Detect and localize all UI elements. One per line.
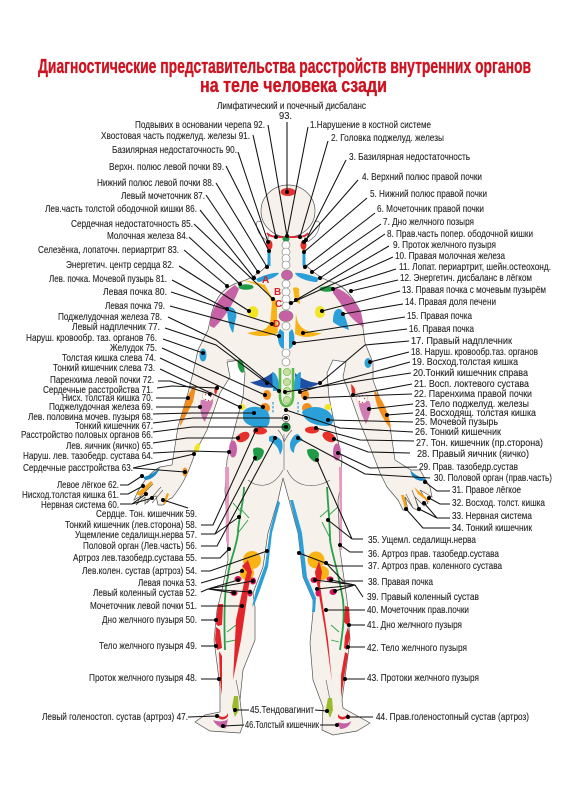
label 54: Лев.колен. сустав (артроз) 54.	[82, 565, 197, 577]
label 91: Хвостовая часть поджелуд. железы 91.	[101, 130, 250, 142]
label 24: 24. Восходящ. толстая кишка	[415, 407, 536, 419]
label 3: 3. Базилярная недостаточность	[349, 151, 470, 163]
label 33	[417, 501, 532, 522]
label 34	[404, 507, 532, 534]
label 9	[294, 239, 496, 302]
label 67: Тонкий кишечник 67.	[75, 420, 153, 432]
body silhouette	[134, 185, 432, 735]
label 92: Подвывих в основании черепа 92.	[135, 119, 265, 131]
label 41: 41. Дно желчного пузыря	[367, 619, 462, 631]
label 12	[349, 272, 532, 293]
label 31	[423, 480, 521, 496]
label 79	[105, 300, 281, 338]
label 26	[284, 408, 501, 438]
label 93: 93.	[279, 110, 292, 122]
label 84: Молочная железа 84.	[107, 230, 188, 242]
label 80: Левая почка 80.	[103, 286, 167, 298]
label 36	[338, 543, 499, 560]
label 91	[101, 130, 278, 239]
spine circles	[279, 241, 293, 366]
label 77	[72, 321, 269, 385]
label 50: Дно желчного пузыря 50.	[102, 614, 197, 626]
label 53	[138, 569, 244, 589]
back orange zones	[243, 280, 322, 337]
label 22: 22. Паренхима правой почки	[414, 388, 532, 400]
label 2: 2. Головка поджелуд. железы	[331, 132, 444, 144]
label 46: 46.Толстый кишечник	[245, 719, 319, 731]
label 60	[41, 492, 154, 511]
label 52: Левый коленный сустав 52.	[93, 587, 197, 599]
label 23: 23. Тело поджелуд. железы	[415, 398, 529, 410]
label 41	[347, 619, 462, 631]
label 76: Наруш. кровообр. таз. органов 76.	[26, 332, 157, 344]
torso and arms	[134, 236, 432, 735]
label 87	[121, 190, 260, 274]
label 14	[341, 296, 496, 316]
gluteal creases	[227, 360, 330, 486]
neck zones	[256, 236, 319, 282]
label 18	[368, 346, 538, 364]
label 83: Селезёнка, лопаточн. периартрит 83.	[38, 244, 179, 256]
zone letters: A	[262, 275, 269, 286]
label 6: 6. Мочеточник правой почки	[377, 203, 484, 215]
neck arc	[267, 233, 308, 237]
label 32	[427, 496, 545, 509]
label 1	[285, 119, 431, 238]
label 93	[217, 100, 366, 194]
label 82	[66, 259, 251, 313]
label 6	[303, 203, 484, 269]
label 27: 27. Тон. кишечник (пр.сторона)	[416, 437, 543, 449]
zone letters: C	[275, 299, 282, 310]
label 77: Левый надплечник 77.	[72, 321, 160, 333]
label 92	[135, 119, 287, 236]
label 21	[351, 378, 529, 397]
green intestine channel	[280, 368, 293, 431]
label 71: Сердечные расстройства 71.	[43, 384, 153, 396]
label 29: 29. Прав. тазобедр.сустав	[419, 461, 518, 473]
label 19	[298, 356, 518, 394]
label 87: Левый мочеточник 87.	[121, 190, 205, 202]
label 83	[38, 244, 229, 288]
label 4: 4. Верхний полюс правой почки	[362, 171, 482, 183]
label 59: Сердце. Тон. кишечник 59.	[96, 508, 197, 520]
label 43: 43. Протоки желчного пузыря	[367, 672, 479, 684]
label 86: Лев.часть толстой ободочной кишки 86.	[45, 203, 197, 215]
label 72: Паренхима левой почки 72.	[50, 374, 154, 386]
label 16: 16. Правая почка	[409, 323, 474, 335]
label 63	[23, 452, 196, 474]
head	[261, 185, 315, 237]
label 47: Левый голеностоп. сустав (артроз) 47.	[42, 711, 188, 723]
label 40	[324, 604, 469, 616]
label 93: Лимфатический и почечный дисбаланс	[217, 100, 366, 112]
label 81: Лев. почка. Мочевой пузырь 81.	[49, 273, 167, 285]
label 82: Энергетич. центр сердца 82.	[66, 259, 174, 271]
label 89	[109, 161, 271, 253]
label 38: 38. Правая почка	[368, 576, 433, 588]
label 20	[283, 367, 528, 394]
label 10: 10. Правая молочная железа	[395, 250, 505, 262]
label 25: 25. Мочевой пузырь	[415, 416, 498, 428]
label 61: Нисход.толстая кишка 61.	[22, 489, 119, 501]
label 20: 20.Тонкий кишечник справа	[413, 367, 528, 379]
label 57	[75, 456, 257, 541]
label 4	[302, 171, 482, 244]
label 3	[304, 151, 470, 242]
label 32: 32. Восход. толст. кишка	[452, 497, 545, 509]
label 48: Проток желчного пузыря 48.	[89, 672, 197, 684]
label 12: 12. Энергетич. дисбаланс в лёгком	[400, 272, 532, 284]
label 21: 21. Восп. локтевого сустава	[414, 378, 529, 390]
label 36: 36. Артроз прав. тазобедр.сустава	[368, 548, 499, 560]
label 65: Лев. яичник (яичко) 65.	[66, 440, 153, 452]
label 70: Нисх. толстая кишка 70.	[62, 392, 153, 404]
label 61	[22, 484, 145, 501]
label 63: Сердечные расстройства 63.	[23, 462, 133, 474]
label 56: Половой орган (Лев.часть) 56.	[83, 540, 197, 552]
label 17	[318, 335, 512, 385]
label 51: Мочеточник левой почки 51.	[90, 600, 197, 612]
label 40: 40. Мочеточник прав.почки	[367, 604, 469, 616]
label 2	[298, 132, 444, 239]
label 9: 9. Проток желчного пузыря	[393, 239, 496, 251]
label 84	[107, 230, 242, 286]
label 13	[320, 284, 546, 313]
label 27	[314, 426, 543, 449]
label 60: Нервная система 60.	[41, 499, 119, 511]
label 74: Толстая кишка слева 74.	[62, 352, 156, 364]
label 78	[58, 311, 281, 393]
lumbar blue lobes	[250, 329, 320, 391]
label 34: 34. Тонкий кишечник	[452, 522, 532, 534]
label 37: 37. Артроз прав. коленного сустава	[368, 560, 502, 572]
label 68: Лев. половина мочев. пузыря 68.	[28, 411, 153, 423]
label 72	[50, 374, 212, 396]
label 75: Желудок 75.	[110, 342, 157, 354]
label 28	[332, 437, 529, 460]
arm zones	[136, 348, 430, 510]
label 28: 28. Правый яичник (яичко)	[417, 448, 529, 460]
label 69: Поджелудочная железа 69.	[49, 401, 153, 413]
leg zones	[213, 467, 351, 729]
label 52	[93, 578, 255, 599]
label 22	[303, 388, 532, 400]
label 42	[346, 642, 467, 654]
label 79: Левая почка 79.	[105, 300, 165, 312]
label 53: Левая почка 53.	[138, 577, 197, 589]
label 58: Тонкий кишечник (лев.сторона) 58.	[65, 519, 197, 531]
label 67	[75, 416, 288, 432]
label 23	[367, 398, 529, 411]
label 90	[112, 144, 270, 244]
zone letters: B	[274, 287, 281, 298]
finger outlines	[141, 484, 419, 700]
label 33: 33. Нервная система	[452, 510, 532, 522]
label 56	[83, 436, 277, 552]
label 35	[315, 458, 476, 546]
label 88	[97, 177, 269, 269]
label 64: Наруш. лев. тазобедр. сустава 64.	[23, 450, 153, 462]
label 59	[96, 498, 197, 520]
label 39	[313, 578, 479, 603]
label 85: Сердечная недостаточность 85.	[71, 218, 193, 230]
label 42: 42. Тело желчного пузыря	[367, 642, 467, 654]
label 35: 35. Ущемл. седалищн.нерва	[368, 534, 476, 546]
label 62: Левое лёгкое 62.	[57, 479, 119, 491]
label 29	[336, 451, 518, 473]
label 8	[318, 228, 533, 280]
label 54	[82, 549, 269, 577]
label 86	[45, 203, 256, 280]
label 45: 45.Тендовагинит	[250, 704, 314, 716]
title	[38, 56, 531, 97]
label 57: Ущемление седалищн.нерва 57.	[75, 529, 197, 541]
label 78: Поджелудочная железа 78.	[58, 311, 162, 323]
label 25	[326, 416, 498, 428]
label 80	[103, 286, 274, 326]
label 19: 19. Восход.толстая кишка	[412, 356, 518, 368]
label 73	[53, 362, 242, 409]
label 15: 15. Правая почка	[407, 310, 472, 322]
pelvic zones	[229, 390, 341, 462]
label 38	[324, 561, 433, 588]
label 44	[346, 711, 529, 723]
label 37	[297, 551, 502, 572]
label 44: 44. Прав.голеностопный сустав (артроз)	[376, 711, 529, 723]
head zone	[280, 188, 296, 196]
label 66	[21, 425, 288, 441]
label 1: 1.Нарушение в костной системе	[310, 119, 431, 131]
zone letters: D	[273, 319, 280, 330]
zone letters	[262, 275, 282, 330]
label 26: 26. Тонкий кишечник	[415, 426, 501, 438]
label 58	[65, 428, 258, 531]
label 43	[343, 672, 479, 684]
label 90: Базилярная недостаточность 90.	[112, 144, 237, 156]
label 17: 17. Правый надплечник	[411, 335, 512, 347]
label 89: Верхн. полюс левой почки 89.	[109, 161, 224, 173]
label 7: 7. Дно желчного позыря	[383, 216, 474, 228]
label 30	[296, 436, 552, 484]
label 62	[57, 474, 144, 491]
label 49: Тело желчного пузыря 49.	[99, 640, 197, 652]
label 16	[292, 323, 474, 345]
label 39: 39. Правый коленный сустав	[367, 591, 479, 603]
label 88: Нижний полюс левой почки 88.	[97, 177, 214, 189]
label 15	[301, 310, 472, 335]
label 75	[110, 342, 267, 397]
label 10	[289, 250, 505, 305]
label 55: Артроз лев.тазобедр.сустава 55.	[73, 552, 197, 564]
label 81	[49, 273, 229, 311]
label 73: Тонкий кишечник слева 73.	[53, 362, 155, 374]
label 7	[310, 216, 474, 274]
label 31: 31. Правое лёгкое	[452, 484, 521, 496]
ears	[256, 221, 320, 242]
label 85	[71, 218, 275, 301]
label 65	[66, 436, 240, 452]
label 66: Расстройство половых органов 66.	[21, 429, 153, 441]
label 14: 14. Правая доля печени	[405, 296, 496, 308]
label 74	[62, 352, 265, 409]
shoulder zones	[210, 284, 364, 333]
label 5	[302, 188, 487, 254]
label 11	[331, 261, 551, 291]
title: на теле человека сзади	[200, 75, 387, 97]
label 76	[26, 332, 205, 355]
label 5: 5. Нижний полюс правой почки	[370, 188, 487, 200]
